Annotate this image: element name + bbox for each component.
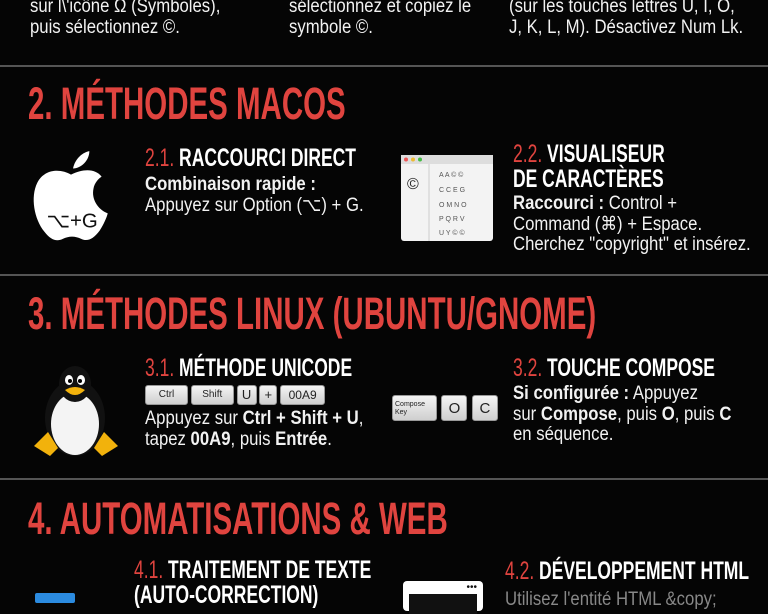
block: 2.2 [513,140,751,255]
keys: compose o c: O [449,400,460,417]
icon: character viewer window: P Q R V [439,216,465,223]
block: 2.2: Cherchez "copyright" et insérez. [513,234,751,255]
keys: ctrl shift u 00a9 [145,385,325,405]
block: 2.1 [145,144,364,216]
block: 3.2 [513,354,731,445]
block: 2.1: Combinaison rapide : [145,174,316,195]
block: 2.2: 2.2. VISUALISEUR [513,140,665,168]
heading: section 4: 4. AUTOMATISATIONS & WEB [28,493,448,544]
block: 4.1: 4.1. TRAITEMENT DE TEXTE [134,556,371,584]
keys: compose o c: Key [395,409,407,416]
keys: compose o c: Compose [395,401,425,408]
block: 4.1: (AUTO-CORRECTION) [134,581,318,609]
text: top remnant middle [289,0,471,38]
icon: browser window [403,581,483,611]
block: 4.2: Utilisez l'entité HTML &copy; [505,589,717,610]
keys: ctrl shift u 00a9: Shift [202,389,222,400]
block: 3.2: 3.2. TOUCHE COMPOSE [513,354,715,382]
icon: tux [34,366,118,456]
block: 4.2: 4.2. DÉVELOPPEMENT HTML [505,557,749,585]
block: 2.2: DE CARACTÈRES [513,165,664,193]
heading: section 3: 3. MÉTHODES LINUX (UBUNTU/GNOME) [28,288,596,339]
icon: character viewer window: © [407,176,419,193]
block: 4.1 [134,556,371,609]
heading: section 2: 2. MÉTHODES MACOS [28,78,346,129]
block: 2.1: 2.1. RACCOURCI DIRECT [145,144,356,172]
icon: character viewer window: U Y © © [439,229,465,237]
text: top remnant middle: symbole ©. [289,16,373,38]
keys: compose o c: C [479,400,490,417]
block: 3.2: Si configurée : Appuyez [513,383,698,404]
keys: ctrl shift u 00a9: Ctrl [159,389,174,400]
text: top remnant right [509,0,743,38]
block: 3.1: 3.1. MÉTHODE UNICODE [145,354,352,382]
block: 3.2: sur Compose, puis O, puis C [513,404,731,424]
block: 3.2: en séquence. [513,424,613,445]
text: top remnant right: J, K, L, M). Désactivez Num Lk. [509,16,743,38]
block: 2.2: Command (⌘) + Espace. [513,214,702,234]
block: 3.1 [145,354,363,450]
block: 3.1: Appuyez sur Ctrl + Shift + U, [145,408,363,429]
icon: word doc [35,593,75,603]
icon: browser window: ••• [466,582,477,593]
text: top remnants: puis sélectionnez ©. [30,16,180,38]
keys: ctrl shift u 00a9: U [242,387,251,402]
block: 2.1: Appuyez sur Option (⌥) + G. [145,194,364,216]
icon: apple [34,151,108,240]
text: top remnants [30,0,220,38]
block: 2.2: Raccourci : Control + [513,193,677,214]
icon: character viewer window: C C E G [439,187,465,194]
icon: character viewer window: A A © © [439,171,464,179]
icon: apple: ⌥+G [46,211,98,233]
keys: compose o c [392,395,498,421]
icon: character viewer window [401,155,493,241]
block: 3.1: tapez 00A9, puis Entrée. [145,428,332,450]
keys: ctrl shift u 00a9: 00A9 [289,388,317,402]
icon: character viewer window: O M N O [439,202,467,209]
keys: ctrl shift u 00a9: + [265,387,272,402]
block: 4.2 [505,556,749,610]
